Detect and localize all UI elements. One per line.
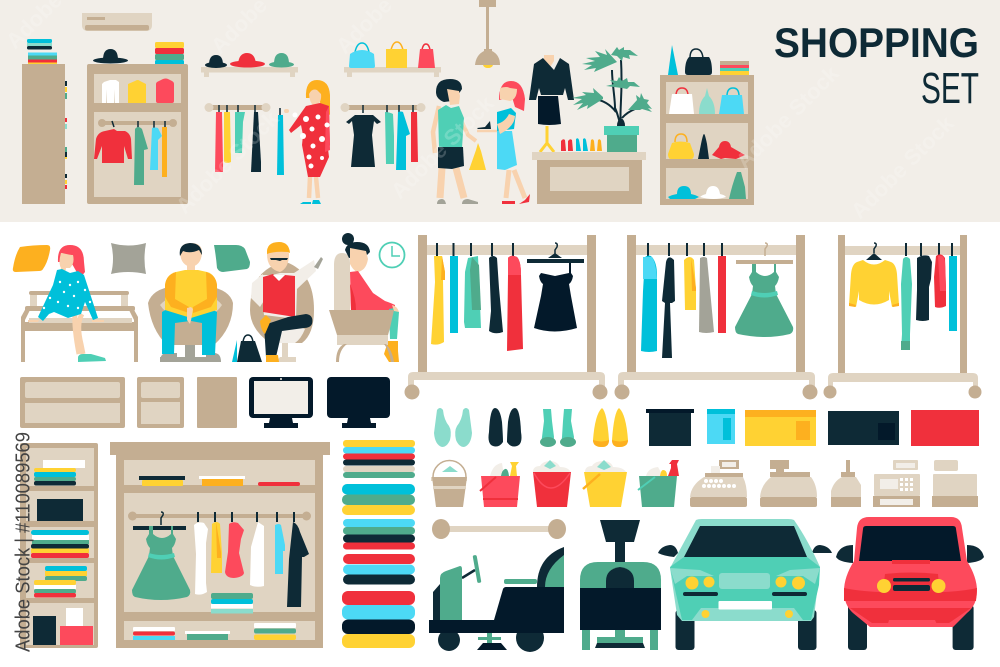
seated man in armchair: [148, 243, 233, 362]
clothes rail one: [204, 103, 284, 175]
red sweater: [94, 129, 132, 163]
monitor dark: [327, 377, 390, 428]
tan bucket: [431, 461, 467, 507]
panel: store interior band: [0, 0, 1000, 222]
yellow box: [745, 410, 816, 446]
display table: [532, 152, 646, 204]
vertical stock credit text: Adobe Stock | #110089569: [12, 432, 34, 652]
folded clothes stacks: [342, 440, 415, 648]
woman on bench: [28, 245, 106, 362]
faint stock watermarks: Adobe Stock: [386, 90, 499, 204]
shoes row: [434, 408, 628, 447]
red box: [911, 410, 979, 446]
woman in blue dress: [497, 81, 530, 204]
bag shelf unit: [660, 45, 754, 205]
red bucket foam: [533, 460, 571, 507]
clothes rail two: [340, 103, 426, 170]
clothes rod: [98, 119, 177, 127]
teal car front: [658, 519, 832, 650]
small cabinet: [137, 377, 184, 428]
navy box: [646, 409, 694, 446]
navy long box: [828, 411, 899, 445]
green dress: [132, 526, 190, 600]
yellow shopping bag: [469, 143, 486, 170]
faint stock watermarks: Adobe Stock: [846, 110, 959, 224]
woman in chair: [329, 233, 399, 362]
woman in teal top: [433, 79, 497, 204]
pillow yellow: [13, 245, 50, 272]
seating people row: [13, 233, 405, 362]
wardrobe rail: [128, 512, 311, 520]
shoes on table: [561, 138, 602, 151]
cyan garment: [150, 128, 162, 170]
red bucket with cleaners: [480, 462, 520, 507]
faint stock watermarks: [1, 0, 959, 224]
air conditioner: [82, 13, 152, 31]
boxes row: [646, 409, 979, 446]
man in egg chair: [232, 242, 323, 362]
faint stock watermarks: Adobe Stock: [731, 60, 844, 174]
orange garment: [162, 127, 167, 177]
shelf unit lower left: [20, 443, 98, 648]
green garment: [134, 127, 148, 185]
cash registers: [690, 460, 978, 507]
floor machine: [580, 520, 661, 650]
green bucket with cleaners: [638, 460, 679, 507]
clothes rack one: [404, 235, 608, 400]
buckets row: [431, 460, 679, 507]
floor sweeper: [429, 547, 564, 652]
plant in pot: [572, 47, 652, 152]
wall shelf with hats: [201, 53, 298, 77]
register five: [932, 460, 978, 507]
title: SHOPPING: [774, 19, 979, 66]
furniture row: [20, 377, 390, 428]
mint shoes: [434, 408, 472, 447]
wall clock: [380, 242, 404, 268]
shoe in hand: [477, 121, 491, 129]
display cabinet with shirts and sweater: [87, 42, 188, 204]
woman in red polka dress: [284, 80, 330, 204]
pillow gray: [111, 243, 146, 274]
red car front: [836, 517, 984, 650]
black box on shelf: [37, 499, 83, 521]
wardrobe: [110, 442, 330, 648]
rail with knobs: [432, 519, 566, 539]
monitor light: [249, 377, 313, 428]
mannequin with suit: [529, 55, 574, 152]
yellow bucket foam: [583, 460, 627, 507]
sideboard: [20, 377, 125, 428]
bench: [21, 291, 138, 362]
navy shoes: [488, 408, 522, 446]
faint stock watermarks: Adobe Stock: [171, 105, 284, 219]
register two: [760, 460, 817, 507]
clothes rack three: [824, 235, 982, 398]
black shopping bag: [232, 335, 262, 362]
cyan box: [707, 409, 735, 444]
clothes rack two: [614, 235, 818, 400]
ceiling lamp: [475, 0, 500, 68]
left cabinet with clothes stacks: [22, 39, 67, 204]
shirt red: [156, 78, 174, 103]
shirt white: [102, 80, 119, 103]
pillow green: [214, 245, 250, 272]
wall shelf with bags: [344, 42, 441, 77]
title: [774, 19, 979, 113]
register one: [690, 460, 747, 507]
register four: [873, 460, 920, 507]
teal heels: [540, 409, 576, 447]
shirt yellow: [128, 80, 146, 103]
register three: [831, 460, 861, 507]
yellow shoes: [593, 408, 628, 447]
panel door: [197, 377, 237, 428]
